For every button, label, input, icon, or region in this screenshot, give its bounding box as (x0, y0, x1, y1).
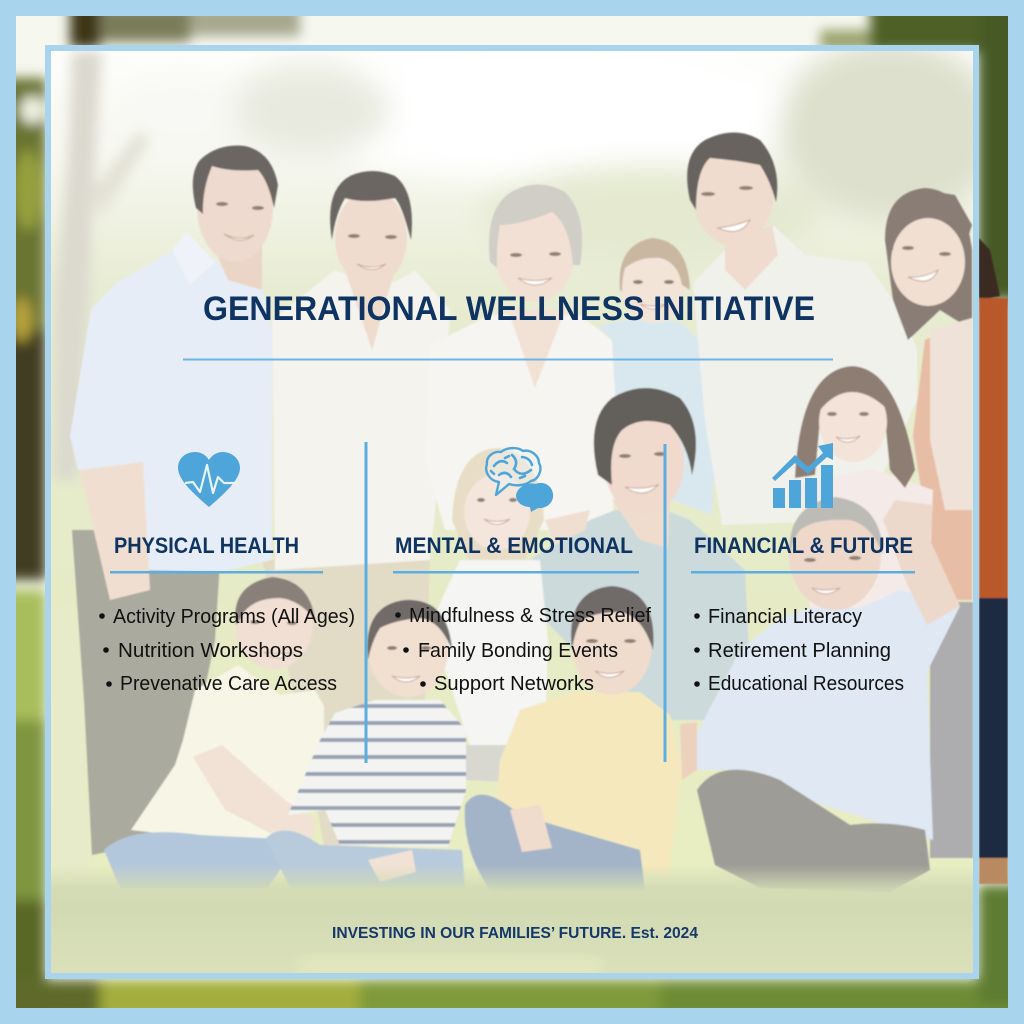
man left head (218, 246, 262, 290)
washed grass in front of the family (51, 865, 973, 973)
title rule (183, 358, 833, 360)
facial features (216, 186, 951, 650)
panel: physical health (99, 452, 355, 695)
girl right (800, 468, 933, 610)
girl in back (598, 318, 716, 515)
panel: mental and emotional (393, 448, 651, 695)
list: mental and emotional: Family Bonding Events (418, 640, 618, 662)
column divider right (664, 444, 666, 762)
list: mental and emotional: Mindfulness & Stress Relief (409, 605, 651, 627)
heading: physical health: PHYSICAL HEALTH (114, 533, 299, 558)
blond child (430, 560, 548, 748)
heading rule (393, 571, 639, 574)
jeans mid (266, 830, 465, 888)
list: mental and emotional: Support Networks (434, 673, 594, 695)
man 2 head (335, 198, 407, 274)
title: GENERATIONAL WELLNESS INITIATIVE (203, 290, 815, 328)
grandfather (697, 590, 960, 840)
list: mental and emotional (395, 605, 651, 695)
man 2 body (272, 270, 450, 570)
man 2 trousers (262, 560, 430, 850)
list: financial and future: Retirement Planning (708, 640, 891, 662)
list: physical health: Activity Programs (All Ages) (113, 606, 355, 628)
list: financial and future: Financial Literacy (708, 606, 862, 628)
woman trousers (930, 602, 973, 858)
heading rule (691, 571, 915, 574)
footer tagline: INVESTING IN OUR FAMILIES’ FUTURE. Est. 2024 (332, 925, 698, 942)
icon: rising bar chart with arrow (772, 443, 833, 508)
list: financial and future: Educational Resources (708, 673, 904, 695)
panel: financial and future (691, 443, 915, 695)
grandmother head (497, 212, 573, 302)
grandmother body (425, 315, 618, 530)
woman in middle body (530, 510, 750, 720)
heading: financial and future: FINANCIAL & FUTURE (694, 533, 913, 558)
heading rule (110, 571, 323, 574)
column divider left (364, 442, 368, 763)
heading: mental and emotional: MENTAL & EMOTIONAL (395, 533, 633, 558)
boy yellow (497, 692, 682, 878)
striped girl (288, 700, 466, 847)
list: financial and future (694, 606, 904, 695)
list: physical health: Prevenative Care Access (120, 673, 337, 695)
woman right (885, 188, 972, 340)
girl left seated (131, 665, 324, 843)
icon: brain with speech bubbles (486, 448, 553, 512)
man left body (70, 233, 272, 572)
man right body (693, 226, 917, 525)
grandfather trousers (697, 770, 930, 892)
jeans left (104, 832, 281, 887)
man right head (694, 158, 775, 244)
list: physical health (99, 606, 355, 695)
list: physical health: Nutrition Workshops (118, 640, 303, 662)
icon: heart with pulse (178, 452, 240, 507)
man left trousers (72, 530, 222, 855)
